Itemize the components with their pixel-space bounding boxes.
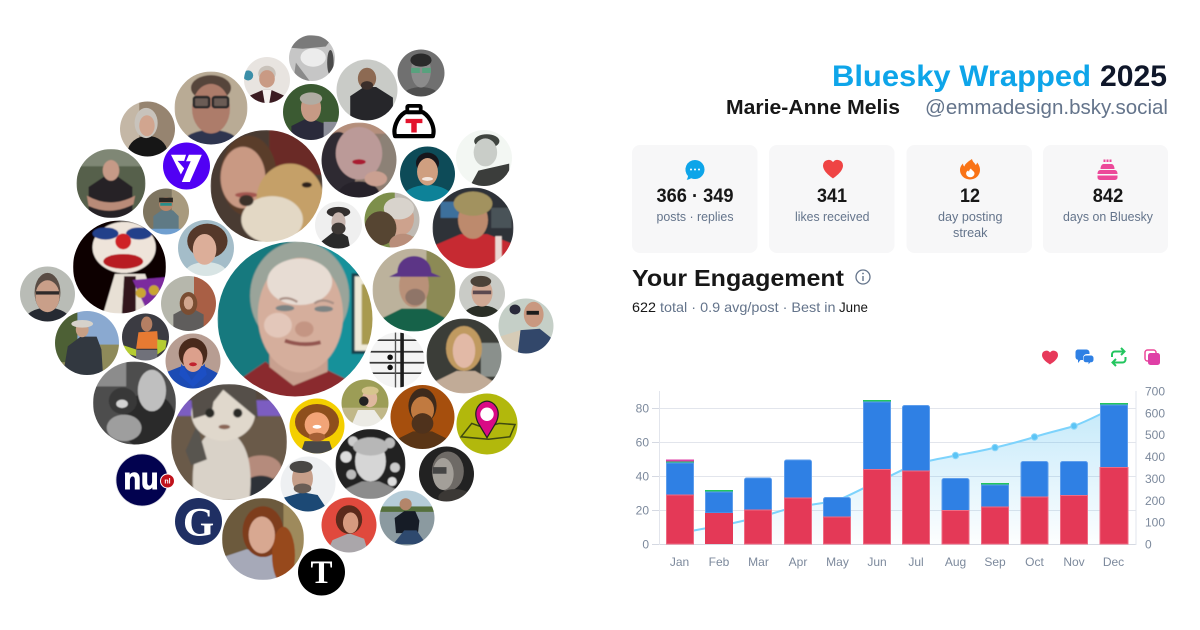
bar: Sep: [981, 483, 1009, 544]
month labels: Jun: [867, 555, 887, 569]
panel: posts and replies: 366 · 349: [656, 186, 734, 207]
avatar: bearded man in denim: [280, 456, 336, 512]
avatar: illustrated bearded man on orange: [390, 385, 454, 449]
icon: quotes squares: [1145, 350, 1160, 365]
month labels: Mar: [748, 555, 769, 569]
bar: May: [824, 498, 850, 544]
month labels: [670, 555, 1124, 569]
month labels: Aug: [945, 555, 966, 569]
right axis labels: 400: [1145, 450, 1165, 464]
avatar: man in purple cap: [372, 248, 456, 332]
panel: posts and replies: posts · replies: [656, 209, 734, 224]
icon: flame: [960, 159, 980, 180]
avatar: bald man with sunglasses: [498, 298, 554, 354]
right axis labels: 0: [1145, 538, 1152, 552]
avatar: man in black t-shirt: [76, 149, 146, 218]
bar: Mar: [744, 478, 772, 544]
month labels: Jul: [908, 555, 924, 569]
avatar: nu.nl logo: nu: [124, 461, 158, 496]
stacked bars: [666, 400, 1128, 544]
avatar: woman with grey hair: [120, 102, 175, 156]
heading: your engagement: Your Engagement: [632, 265, 844, 291]
profile name and handle: @emmadesign.bsky.social: [925, 97, 1168, 119]
avatar: woman on red: [322, 498, 376, 552]
avatar: man in orange shirt: [122, 314, 169, 362]
right axis labels: 600: [1145, 406, 1165, 420]
panel: likes received: likes received: [795, 209, 870, 224]
bar: Dec: [1100, 403, 1128, 544]
avatar: smiling man on teal: [400, 146, 455, 202]
icon: heart: [823, 160, 843, 178]
avatar: clown in suit: [73, 220, 166, 314]
left axis labels: 20: [636, 504, 649, 518]
engagement summary: total · 0.9 avg/post · Best in: [660, 299, 836, 315]
avatar: short-haired person with glasses: [459, 271, 505, 317]
avatar: map pin logo on olive: [456, 394, 518, 454]
avatar: man with glasses far left: [20, 266, 75, 322]
avatar: violet V logo: [163, 142, 210, 190]
icon: reposts arrows: [1112, 348, 1126, 366]
title: 2025: [1100, 60, 1167, 93]
avatar: woman in blue: [166, 334, 220, 388]
engagement summary: 622: [632, 299, 656, 315]
panel: posts and replies: [632, 145, 758, 253]
avatar: halftone portrait: [456, 130, 512, 186]
avatar: New York Times T logo: T: [310, 555, 333, 591]
bar: Feb: [705, 490, 733, 544]
bar: Nov: [1060, 462, 1088, 544]
panel: day posting streak: 12: [960, 186, 980, 207]
avatar: woman with hat and camera: [342, 380, 388, 426]
avatar bubble cluster: [20, 35, 554, 596]
avatar: red-haired woman: [222, 498, 304, 584]
right axis labels: 500: [1145, 428, 1165, 442]
panel: day posting streak: streak: [953, 225, 988, 240]
panel: likes received: [769, 145, 894, 253]
panel: days on Bluesky: days on Bluesky: [1063, 209, 1153, 224]
avatar: cartoon curly man on yellow: [290, 398, 344, 454]
title: Bluesky Wrapped: [832, 60, 1091, 93]
avatar: man in front of book page: [336, 60, 398, 120]
cumulative points: [952, 423, 1077, 459]
bar: Jan: [666, 460, 694, 544]
icon: likes heart: [1042, 351, 1058, 364]
right axis labels: 200: [1145, 494, 1165, 508]
month labels: Oct: [1025, 555, 1044, 569]
icon: info: [856, 270, 870, 284]
avatar: man in hat in landscape: [55, 311, 119, 377]
left axis labels: 0: [642, 538, 649, 552]
avatar: man in red shirt: [432, 188, 514, 268]
left axis labels: 60: [636, 436, 649, 450]
avatar: blonde woman: [426, 318, 503, 394]
avatar: tabby cat: [171, 384, 287, 503]
bar: Aug: [942, 478, 969, 544]
engagement chart: [636, 384, 1165, 569]
left axis labels: 40: [636, 470, 649, 484]
month labels: Apr: [789, 555, 807, 569]
panel: day posting streak: day posting: [938, 209, 1002, 224]
right axis labels: 100: [1145, 516, 1165, 530]
cumulative line: [680, 408, 1114, 533]
left axis labels: 80: [636, 402, 649, 416]
right axis labels: 300: [1145, 472, 1165, 486]
avatar: black and white woman: [336, 429, 406, 499]
month labels: May: [826, 555, 849, 569]
avatar: woman on a boat: [380, 490, 434, 548]
month labels: Dec: [1103, 555, 1124, 569]
panel: day posting streak: [906, 145, 1032, 253]
avatar: Guardian G logo: [175, 498, 222, 545]
profile name and handle: Marie-Anne Melis: [726, 97, 900, 119]
bar: Jun: [863, 400, 891, 544]
profile name and handle: [726, 97, 1168, 119]
icon: cake: [1098, 160, 1118, 180]
right axis labels: 700: [1145, 384, 1165, 398]
icon: replies bubbles: [1075, 350, 1094, 364]
panel: days on Bluesky: [1043, 145, 1168, 253]
panel: days on Bluesky: 842: [1093, 186, 1123, 207]
avatar: music notation: [370, 332, 424, 388]
icon: chat bubble: [685, 160, 705, 180]
avatar: nu.nl logo: nl: [164, 478, 171, 486]
avatar: woman with dark hair and red lips: [322, 122, 396, 198]
month labels: Nov: [1063, 555, 1085, 569]
bar: Oct: [1021, 462, 1048, 544]
avatar: nu.nl logo: [116, 454, 174, 506]
bar: Jul: [902, 406, 930, 544]
month labels: Jan: [670, 555, 689, 569]
avatar: sketched face black and white: [289, 35, 335, 81]
left axis labels: [636, 402, 649, 552]
avatar: woman by brick wall: [161, 276, 216, 331]
avatar: woman hugging a dog: [364, 192, 420, 253]
avatar: man in cap among leaves: [283, 84, 340, 140]
avatar: woman with small dog black and white: [93, 362, 176, 451]
avatar: grey man with coloured glasses: [398, 50, 444, 96]
chart legend icons: [1042, 348, 1160, 366]
engagement summary: June: [839, 299, 868, 315]
avatar: man in suit: [243, 57, 290, 103]
avatar: curly-haired woman: [178, 220, 234, 276]
grid lines and axes: [652, 391, 1136, 545]
avatar: Guardian G logo: G: [183, 500, 214, 544]
month labels: Feb: [709, 555, 730, 569]
avatar: woman with dog: [210, 130, 325, 243]
avatar: old man in glasses black and white: [419, 446, 474, 506]
bar: Apr: [784, 460, 812, 544]
month labels: Sep: [984, 555, 1006, 569]
avatar: man with sunglasses at table: [143, 188, 190, 236]
avatar: large woman on teal: [218, 242, 377, 400]
avatar: bearded man black and white: [315, 202, 362, 248]
cumulative area: [680, 408, 1114, 544]
avatar: man with glasses: [174, 72, 248, 144]
avatar: bag icon with T: [394, 106, 434, 136]
right axis labels: [1145, 384, 1165, 552]
avatar: New York Times T logo: [298, 548, 345, 596]
panel: likes received: 341: [817, 186, 847, 207]
